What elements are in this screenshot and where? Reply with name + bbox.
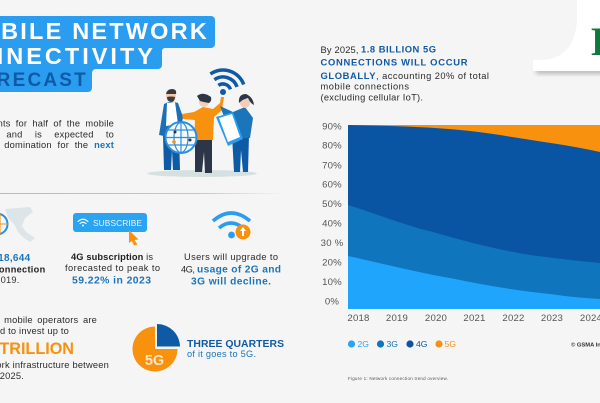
- icon: world map and globe: [0, 207, 35, 242]
- area: 3G: [348, 205, 600, 309]
- x axis labels: 2019: [386, 313, 408, 324]
- x axis labels: 2021: [463, 313, 486, 324]
- 5G headline text: By 2025,: [320, 45, 358, 55]
- stat: upgrade to 4G: Users will upgrade to: [184, 252, 278, 262]
- x axis labels: 2020: [425, 313, 447, 324]
- y axis labels: 30 %: [321, 238, 344, 249]
- 5G headline text: GLOBALLY: [320, 70, 376, 81]
- 5G headline text: 1.8 BILLION 5G: [361, 44, 436, 54]
- area: 5G: [348, 125, 600, 309]
- y axis labels: 80%: [322, 140, 342, 152]
- legend: 4G: [416, 339, 428, 349]
- y axis labels: 70%: [322, 160, 342, 172]
- stat: upgrade to 4G: usage of 2G and: [197, 264, 281, 276]
- pie: three quarters to 5G: 5G: [145, 353, 164, 369]
- y axis labels: 60%: [322, 180, 342, 190]
- legend: 2G: [358, 339, 369, 349]
- 5G headline text: , accounting 20% of total: [376, 71, 489, 81]
- person right: [220, 94, 254, 172]
- stat: 4G subscription: forecasted to peak to: [65, 263, 160, 273]
- x axis labels: 2022: [502, 313, 525, 324]
- stat: connections with map: [0, 207, 46, 285]
- y axis labels: 0%: [325, 296, 339, 308]
- 5G headline text: (excluding cellular IoT).: [320, 92, 423, 102]
- x axis labels: 2018: [347, 313, 370, 324]
- legend: 5G: [444, 339, 456, 349]
- intro paragraph: [0, 118, 114, 150]
- y axis labels: [321, 122, 344, 308]
- y axis labels: 40%: [322, 218, 342, 230]
- illustration: people with devices and wifi: [147, 70, 257, 177]
- 5G headline text: [320, 44, 489, 102]
- icon: subscribe button: SUBSCRIBE: [93, 218, 142, 228]
- tablet: [216, 112, 243, 146]
- globe: [166, 122, 196, 153]
- figure caption: Figure 1: Network connection trend overview.: [348, 376, 448, 381]
- person left: [159, 89, 183, 170]
- 5G headline text: mobile connections: [320, 82, 409, 92]
- stat: upgrade to 4G: 4G,: [181, 264, 195, 274]
- pie: three quarters to 5G: [133, 324, 180, 372]
- stat: upgrade to 4G: 3G will decline.: [191, 276, 271, 288]
- x axis labels: [347, 313, 600, 324]
- stat: upgrade to 4G: [181, 213, 281, 288]
- x axis labels: 2023: [541, 313, 563, 324]
- stat: 4G subscription: 4G subscription is: [71, 252, 153, 262]
- y axis labels: 50%: [322, 199, 342, 210]
- callout: three quarters: of it goes to 5G.: [187, 349, 256, 359]
- person middle: [182, 94, 224, 173]
- legend: [348, 339, 456, 349]
- logo panel: [533, 0, 600, 74]
- 5G headline text: CONNECTIONS WILL OCCUR: [320, 56, 468, 68]
- icon: wifi with upgrade badge: [213, 213, 250, 240]
- callout: three quarters: THREE QUARTERS: [187, 339, 284, 350]
- legend: 3G: [386, 339, 398, 349]
- y axis labels: 10%: [322, 277, 342, 288]
- stat: investment: [0, 315, 109, 381]
- title banner: [0, 16, 215, 92]
- stat: 4G subscription: 59.22% in 2023: [72, 276, 151, 286]
- divider: [0, 192, 285, 195]
- y axis labels: 20%: [322, 258, 342, 268]
- y axis labels: 90%: [322, 122, 342, 132]
- stat: 4G subscription: [65, 213, 160, 286]
- area: 4G: [348, 125, 600, 309]
- wifi symbol: [210, 70, 244, 95]
- callout: three quarters: [187, 339, 284, 359]
- area: 2G: [348, 256, 600, 309]
- area chart: network connection trend: [348, 125, 600, 309]
